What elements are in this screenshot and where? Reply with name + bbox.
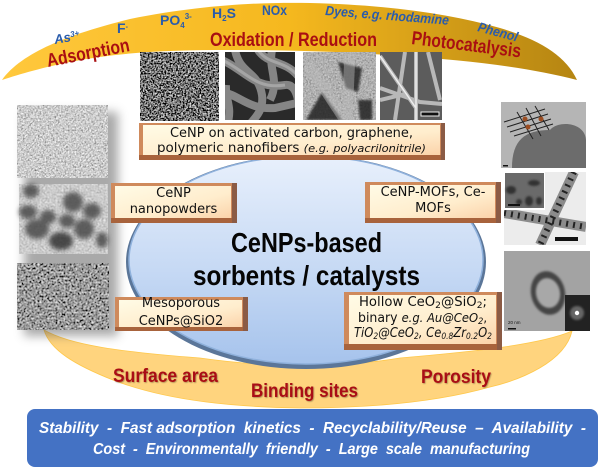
text: hollow line: 2 [435, 301, 441, 311]
image: nanorods TEM [504, 172, 586, 245]
text: formula line: , Ce [419, 326, 441, 341]
text: formula line: 0.2 [466, 332, 478, 342]
heading: sorbents / catalysts: sorbents / catalysts [193, 260, 420, 291]
panel: top micrographs [140, 50, 442, 124]
text: formula line: @CeO [378, 326, 414, 341]
text: CeNP: CeNP [156, 186, 191, 201]
panel: top application band [2, 2, 577, 80]
label box: CeNP on activated carbon [139, 123, 445, 160]
text: CeNPs@SiO2: CeNPs@SiO2 [139, 314, 223, 329]
heading: adsorption: Adsorption [45, 35, 131, 72]
label: scale: 20 nm [508, 320, 521, 325]
panel: right micrographs [501, 102, 590, 331]
text: binary line: binary e.g. Au@CeO [358, 311, 481, 326]
image: nanoparticle TEM [17, 105, 108, 178]
text: PO43-: PO [160, 12, 180, 28]
text: F-: - [126, 24, 129, 31]
text: H2S: S [227, 5, 236, 21]
text: formula line: 2 [414, 332, 419, 342]
text: nanopowders: nanopowders [130, 202, 218, 217]
text: phenol: Phenol [476, 19, 520, 45]
text: line one: CeNP on activated carbon, graphene, [170, 126, 413, 141]
text: hollow line: @SiO [441, 295, 477, 310]
text: MOFs: MOFs [415, 201, 451, 216]
text: CeNP-MOFs, Ce-: CeNP-MOFs, Ce- [381, 185, 486, 200]
heading: porosity: Porosity [421, 367, 491, 388]
heading: surface area: Surface area [113, 366, 218, 387]
text: formula line: Zr [452, 326, 468, 341]
panel: left micrographs [17, 105, 118, 336]
text: hollow line: ; [483, 295, 487, 310]
image: polymer fibers [225, 52, 295, 120]
text: formula line: TiO [354, 326, 376, 341]
image: mesoporous silica [17, 263, 109, 330]
label box: Hollow CeO2 [344, 292, 502, 350]
text: NOx: NOx [262, 2, 287, 18]
image: nanopowder TEM [19, 184, 108, 254]
text: PO43-: 4 [180, 21, 185, 30]
image: coated fibers [303, 52, 376, 120]
text: formula line: 0.8 [441, 332, 454, 342]
text: criteria line one: Stability - Fast adsorption kinetics - Recyclability/Reuse – Availability - [39, 420, 586, 437]
text: binary line: , [483, 311, 487, 325]
text: dyes: Dyes, e.g. rhodamine [325, 3, 450, 28]
text: H2S: 2 [222, 14, 227, 23]
text: formula line: 2 [487, 332, 492, 342]
text: As3+: As [53, 29, 72, 47]
label box: CeNP-MOFs [365, 182, 501, 223]
image: MOF TEM [501, 102, 586, 168]
heading: oxidation / reduction: Oxidation / Reduction [210, 30, 377, 51]
heading: binding sites: Binding sites [251, 381, 358, 402]
heading: CeNPs-based: CeNPs-based [231, 227, 382, 258]
text: criteria line two: Cost - Environmentally friendly - Large scale manufacturing [93, 441, 530, 458]
label box: CeNP nanopowders [111, 183, 237, 223]
text: formula line: 2 [373, 332, 378, 342]
image: inset TEM [504, 172, 545, 210]
text: binary line: 2 [478, 317, 483, 327]
label box: Mesoporous [115, 296, 248, 331]
text: F-: F [117, 20, 126, 36]
text: formula line: O [478, 326, 487, 341]
text: As3+: 3+ [69, 29, 80, 39]
panel: central ellipse [126, 155, 486, 369]
image: smooth nanofibers [380, 52, 442, 120]
text: Mesoporous: Mesoporous [142, 296, 220, 311]
heading: photocatalysis: Photocatalysis [410, 28, 522, 62]
image: hollow sphere TEM [504, 251, 590, 331]
text: line two: polymeric nanofibers (e.g. polyacrilonitrile) [157, 141, 426, 156]
panel: bottom properties band [44, 330, 572, 408]
text: H2S: H [212, 5, 222, 21]
text: hollow line: 2 [477, 301, 483, 311]
image: nanoparticle carbon [140, 52, 219, 121]
panel: criteria box [27, 409, 598, 467]
text: hollow line: Hollow CeO [359, 295, 434, 310]
text: PO43-: 3- [185, 12, 192, 21]
